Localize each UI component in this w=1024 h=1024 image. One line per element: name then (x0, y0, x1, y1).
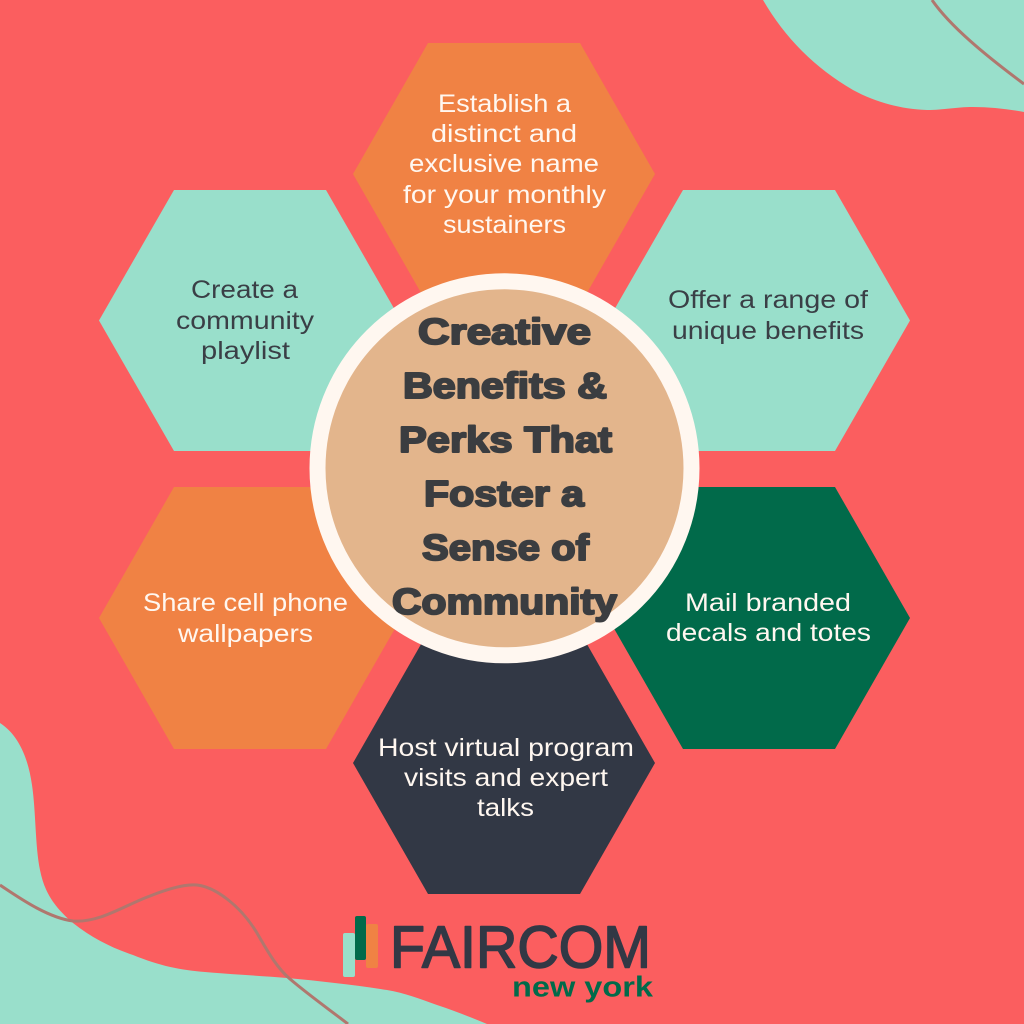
logo subtitle: new york (512, 972, 654, 1004)
curve: bottom left line (0, 885, 348, 1024)
hexagon: bottom, virtual visits: visits and expert (404, 764, 608, 792)
hexagon: upper left, community playlist: Create a (191, 276, 298, 304)
hexagon: lower right, decals and totes: Mail branded (685, 589, 851, 617)
title: Community (392, 581, 617, 622)
title (392, 311, 617, 622)
hexagon: bottom, virtual visits: talks (477, 794, 534, 822)
hexagon: top, establish name: distinct and (431, 120, 577, 148)
title: Perks That (399, 419, 612, 460)
logo: Faircom New York (343, 914, 654, 1004)
hexagon: upper right, unique benefits: Offer a range of (668, 286, 868, 314)
hexagon: top, establish name: exclusive name (409, 150, 599, 178)
hexagon: bottom, virtual visits: Host virtual program (378, 734, 634, 762)
hexagon: lower left, wallpapers: wallpapers (177, 620, 313, 648)
hexagon: upper right, unique benefits (608, 190, 910, 451)
logo icon bars (343, 916, 378, 977)
title: Benefits & (403, 365, 607, 406)
center circle (318, 281, 692, 655)
hexagon: upper left, community playlist (99, 190, 401, 451)
hexagon: bottom, virtual visits (353, 632, 655, 894)
hexagon: lower left, wallpapers (99, 487, 401, 749)
hexagon: top, establish name: for your monthly (403, 181, 607, 209)
hexagon: top, establish name: sustainers (443, 211, 566, 239)
logo wordmark: FAIRCOM (390, 914, 651, 980)
hexagon: upper left, community playlist: playlist (201, 337, 290, 365)
title: Foster a (424, 473, 585, 514)
hexagon: lower right, decals and totes (608, 487, 910, 749)
hexagon: top, establish name (353, 43, 655, 305)
curve: top right line (932, 0, 1024, 84)
title: Sense of (422, 527, 590, 568)
hexagon: lower left, wallpapers: Share cell phone (143, 589, 348, 617)
blob: top right (763, 0, 1024, 112)
hexagon: upper left, community playlist: community (176, 307, 315, 335)
title: Creative (418, 311, 591, 352)
hexagon: top, establish name: Establish a (438, 90, 571, 118)
blob: bottom left (0, 723, 487, 1024)
hexagon: lower right, decals and totes: decals and totes (666, 619, 871, 647)
hexagon: upper right, unique benefits: unique benefits (672, 317, 864, 345)
